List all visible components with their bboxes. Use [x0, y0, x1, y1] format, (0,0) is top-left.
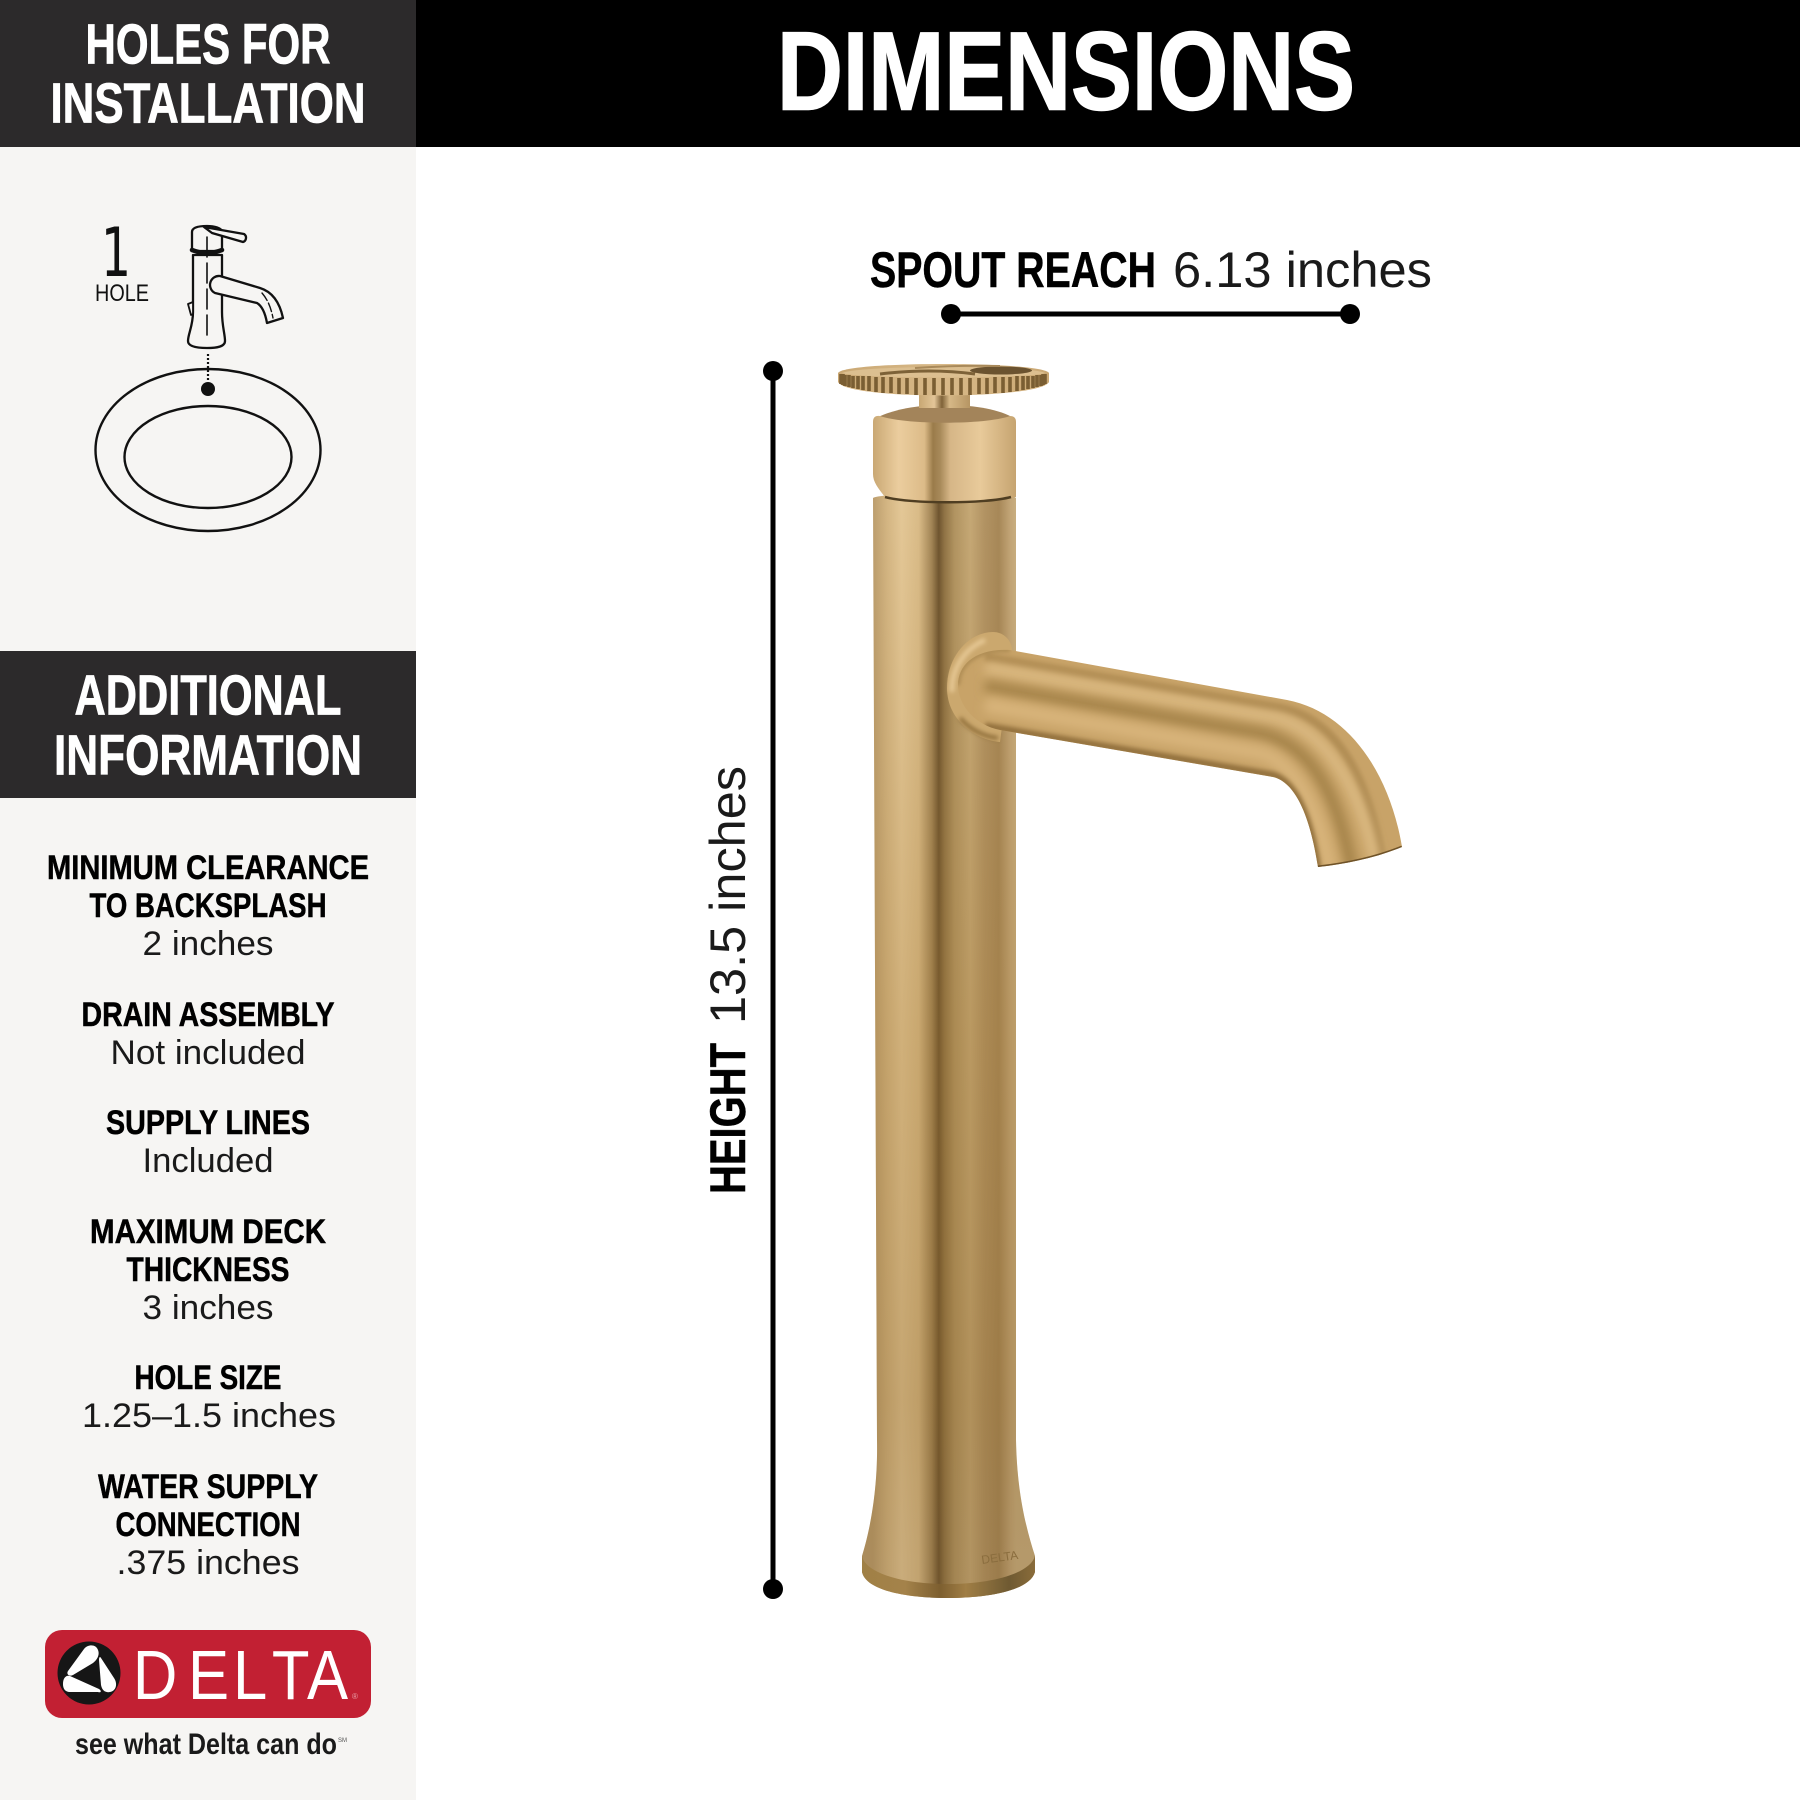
- spec: drain assembly: DRAIN ASSEMBLY: [82, 996, 335, 1034]
- dimension label: spout reach: 6.13 inches: [1173, 242, 1432, 298]
- spec: hole size: [82, 1359, 336, 1435]
- logo: Delta: [45, 1630, 371, 1761]
- heading: additional information: INFORMATION: [54, 724, 362, 788]
- faucet head cylinder: [873, 405, 1016, 502]
- heading: holes for installation: HOLES FOR: [86, 12, 330, 76]
- heading: holes for installation: [0, 0, 416, 147]
- faucet body and flared base: [862, 494, 1035, 1598]
- spec: drain assembly: Not included: [110, 1034, 306, 1072]
- heading: holes for installation: INSTALLATION: [50, 72, 366, 136]
- spec: supply lines: SUPPLY LINES: [106, 1104, 310, 1142]
- arrow: height dimension line: [763, 361, 783, 1599]
- title banner: dimensions: DIMENSIONS: [777, 10, 1355, 134]
- icon: faucet line drawing: [188, 226, 283, 348]
- arrow: spout reach dimension line: [941, 304, 1360, 324]
- spec: drain assembly: [82, 996, 335, 1072]
- heading: additional information: ADDITIONAL: [74, 664, 342, 728]
- spec: maximum deck thickness: 3 inches: [142, 1289, 274, 1327]
- hole count label: [95, 214, 149, 307]
- spec: minimum clearance: MINIMUM CLEARANCE: [47, 849, 369, 887]
- spec: minimum clearance: TO BACKSPLASH: [90, 887, 326, 925]
- spec: minimum clearance: 2 inches: [142, 925, 274, 963]
- spec: maximum deck thickness: THICKNESS: [126, 1251, 290, 1289]
- hole count label: HOLE: [95, 280, 149, 307]
- icon: sink basin with mounting hole: [96, 354, 320, 531]
- spec: water supply connection: CONNECTION: [116, 1506, 300, 1544]
- spec: minimum clearance: [47, 849, 369, 963]
- logo: Delta: ®: [352, 1692, 358, 1701]
- faucet photo illustration: [838, 364, 1420, 1598]
- spec: maximum deck thickness: [90, 1213, 326, 1327]
- hole count label: 1: [101, 214, 131, 293]
- knurled wheel handle: [838, 364, 1049, 396]
- dimension label: height: 13.5 inches: [700, 766, 756, 1024]
- logo: Delta: see what Delta can do: [75, 1728, 337, 1761]
- dimension label: spout reach: [870, 242, 1432, 298]
- spec: water supply connection: WATER SUPPLY: [98, 1468, 318, 1506]
- logo: Delta: DELTA: [133, 1635, 348, 1714]
- faucet body and flared base: DELTA: [980, 1548, 1019, 1567]
- spec: water supply connection: .375 inches: [116, 1544, 300, 1582]
- spout flange: [947, 632, 1012, 742]
- panel: left sidebar: [0, 0, 416, 1800]
- spec: supply lines: [106, 1104, 310, 1180]
- dimension label: spout reach: SPOUT REACH: [870, 242, 1156, 298]
- title banner: dimensions: [416, 0, 1800, 147]
- heading: additional information: [0, 651, 416, 798]
- logo: Delta: SM: [338, 1738, 347, 1744]
- spec: water supply connection: [98, 1468, 318, 1582]
- spec: hole size: HOLE SIZE: [134, 1359, 282, 1397]
- dimension label: height: [700, 766, 756, 1194]
- spec: supply lines: Included: [142, 1142, 274, 1180]
- spec: hole size: 1.25–1.5 inches: [82, 1397, 336, 1435]
- spec: maximum deck thickness: MAXIMUM DECK: [90, 1213, 326, 1251]
- dimension label: height: HEIGHT: [700, 1043, 756, 1194]
- faucet spout: [958, 650, 1402, 867]
- handle neck: [919, 392, 970, 408]
